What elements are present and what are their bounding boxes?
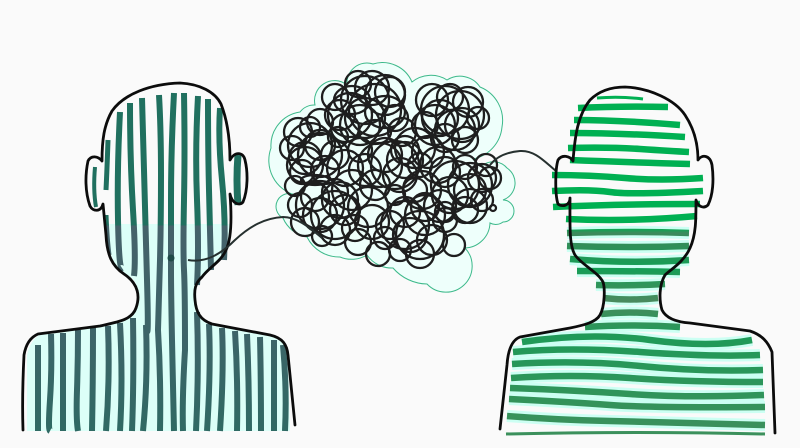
connecting wire right	[490, 151, 556, 171]
person left	[23, 83, 295, 431]
head outline right	[500, 87, 775, 433]
tangled thought cloud	[269, 63, 515, 292]
vertical stripes left	[38, 93, 286, 431]
head outline left	[23, 83, 295, 430]
horizontal stripes right	[506, 97, 765, 434]
pale lower fill left	[27, 224, 290, 431]
tangled line loops	[280, 71, 501, 268]
illustration: two heads connected by a tangled line	[21, 62, 776, 436]
pale halo behind right stripes	[506, 232, 765, 434]
person right	[500, 87, 775, 434]
cloud halo	[269, 63, 515, 292]
dot	[168, 254, 174, 262]
connecting wire left	[188, 217, 322, 261]
